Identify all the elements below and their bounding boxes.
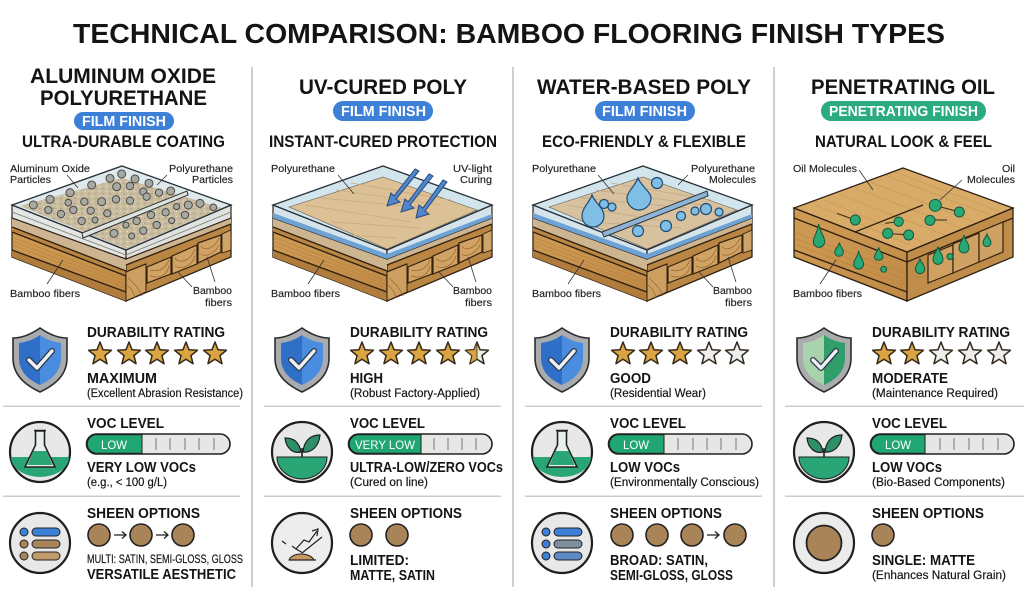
sheen options: SHEEN OPTIONS xyxy=(87,506,200,522)
sheen options: SINGLE: MATTE xyxy=(872,553,975,569)
voc level: VOC LEVEL xyxy=(87,416,164,432)
durability rating: MODERATE xyxy=(872,371,948,387)
sheen options: LIMITED: xyxy=(350,553,409,569)
label: polyurethane molecules: Molecules xyxy=(709,174,756,186)
heading: aluminum oxide polyurethane xyxy=(30,65,216,110)
diagram: penetrating oil floor cross-section xyxy=(794,168,1013,301)
durability rating xyxy=(87,325,243,400)
panel: uv-cured poly xyxy=(269,76,503,584)
durability rating: DURABILITY RATING xyxy=(872,325,1010,341)
sheen options: SEMI-GLOSS, GLOSS xyxy=(610,568,733,584)
icon: blue shield xyxy=(275,328,329,392)
voc level: LOW VOCs xyxy=(872,460,942,476)
label: bamboo fibers right: fibers xyxy=(465,297,492,309)
sheen options xyxy=(350,506,462,584)
label: polyurethane: Polyurethane xyxy=(532,163,596,175)
badge: penetrating finish: PENETRATING FINISH xyxy=(829,104,978,120)
heading: penetrating oil: PENETRATING OIL xyxy=(811,76,995,99)
voc level: VOC LEVEL xyxy=(350,416,425,432)
icon: sheen list xyxy=(10,513,70,573)
durability rating: DURABILITY RATING xyxy=(350,325,488,341)
icon: flask xyxy=(532,422,592,482)
label: bamboo fibers left: Bamboo fibers xyxy=(10,288,80,300)
badge: film finish xyxy=(595,101,695,121)
durability rating: HIGH xyxy=(350,371,383,387)
sheen options xyxy=(87,506,243,583)
label: aluminum oxide particles xyxy=(10,163,90,186)
voc level xyxy=(870,416,1014,489)
durability rating: MAXIMUM xyxy=(87,371,157,387)
sheen options: MATTE, SATIN xyxy=(350,568,435,584)
label: bamboo fibers: Bamboo fibers xyxy=(793,288,862,300)
durability rating: DURABILITY RATING xyxy=(87,325,225,341)
voc level: (e.g., < 100 g/L) xyxy=(87,477,167,489)
durability rating xyxy=(872,325,1010,400)
sheen options xyxy=(610,506,746,584)
label: bamboo fibers right: Bamboo xyxy=(713,285,752,297)
icon: blue shield xyxy=(535,328,589,392)
subheading: ECO-FRIENDLY & FLEXIBLE xyxy=(542,133,746,151)
voc level: LOW xyxy=(623,440,649,452)
heading: aluminum oxide polyurethane: POLYURETHANE xyxy=(40,87,207,110)
sheen options: VERSATILE AESTHETIC xyxy=(87,567,236,583)
label: bamboo fibers right: Bamboo xyxy=(193,285,232,297)
voc level: (Bio-Based Components) xyxy=(872,477,1005,489)
label: aluminum oxide particles: Aluminum Oxide xyxy=(10,163,90,175)
icon: application tool xyxy=(272,513,332,573)
sheen options: SHEEN OPTIONS xyxy=(610,506,722,522)
voc level xyxy=(86,416,230,489)
voc level: LOW xyxy=(101,440,127,452)
label: polyurethane molecules xyxy=(691,163,756,186)
subheading: ULTRA-DURABLE COATING xyxy=(22,133,225,151)
label: uv-light curing xyxy=(453,163,492,186)
label: bamboo fibers right: fibers xyxy=(725,297,752,309)
voc level xyxy=(608,416,759,489)
durability rating: GOOD xyxy=(610,371,651,387)
sheen options: SHEEN OPTIONS xyxy=(872,506,984,522)
title: TECHNICAL COMPARISON: BAMBOO FLOORING FINISH TYPES xyxy=(73,18,945,49)
label: bamboo fibers right xyxy=(713,285,752,309)
diagram: water-based floor cross-section xyxy=(533,166,752,301)
label: bamboo fibers right: Bamboo xyxy=(453,285,492,297)
panel: water-based poly xyxy=(532,76,759,584)
voc level: VOC LEVEL xyxy=(610,416,686,432)
voc level: VOC LEVEL xyxy=(872,416,947,432)
subheading: INSTANT-CURED PROTECTION xyxy=(269,133,497,151)
subheading: NATURAL LOOK & FEEL xyxy=(815,133,992,151)
label: polyurethane particles: Polyurethane xyxy=(169,163,233,175)
label: polyurethane: Polyurethane xyxy=(271,163,335,175)
sheen options: SHEEN OPTIONS xyxy=(350,506,462,522)
voc level: ULTRA-LOW/ZERO VOCs xyxy=(350,460,503,476)
label: polyurethane particles: Particles xyxy=(192,174,233,186)
badge: film finish: FILM FINISH xyxy=(602,104,687,120)
panel: penetrating oil xyxy=(793,76,1015,582)
heading: aluminum oxide polyurethane: ALUMINUM OXIDE xyxy=(30,65,216,88)
icon: flask xyxy=(10,422,70,482)
label: bamboo fibers left: Bamboo fibers xyxy=(271,288,340,300)
label: aluminum oxide particles: Particles xyxy=(10,174,51,186)
icon: single matte circle xyxy=(794,513,854,573)
diagram: uv-cured floor cross-section xyxy=(273,166,492,301)
label: oil molecules right: Molecules xyxy=(967,174,1015,186)
voc level: LOW xyxy=(885,440,911,452)
badge: film finish: FILM FINISH xyxy=(82,114,166,130)
label: oil molecules left: Oil Molecules xyxy=(793,163,857,175)
voc level: LOW VOCs xyxy=(610,460,680,476)
durability rating xyxy=(350,325,488,400)
label: oil molecules right: Oil xyxy=(1002,163,1015,175)
durability rating: (Maintenance Required) xyxy=(872,388,998,400)
label: bamboo fibers left: Bamboo fibers xyxy=(532,288,601,300)
sheen options: BROAD: SATIN, xyxy=(610,553,708,569)
sheen options: (Enhances Natural Grain) xyxy=(872,570,1006,582)
label: polyurethane particles xyxy=(169,163,233,186)
label: uv-light curing: Curing xyxy=(460,174,492,186)
voc level: (Environmentally Conscious) xyxy=(610,477,759,489)
icon: sheen list xyxy=(532,513,592,573)
label: polyurethane molecules: Polyurethane xyxy=(691,163,755,175)
durability rating: (Excellent Abrasion Resistance) xyxy=(87,388,243,400)
icon: plant xyxy=(794,422,854,482)
panel: aluminum oxide polyurethane xyxy=(10,65,243,583)
label: oil molecules right xyxy=(967,163,1015,186)
label: uv-light curing: UV-light xyxy=(453,163,492,175)
icon: green shield xyxy=(797,328,851,392)
sheen options xyxy=(872,506,1006,582)
voc level: (Cured on line) xyxy=(350,477,428,489)
label: bamboo fibers right xyxy=(193,285,232,309)
heading: water-based poly: WATER-BASED POLY xyxy=(537,76,751,99)
voc level: VERY LOW xyxy=(355,440,415,452)
badge: film finish xyxy=(333,101,433,121)
durability rating: (Residential Wear) xyxy=(610,388,706,400)
durability rating xyxy=(610,325,748,400)
durability rating: (Robust Factory-Applied) xyxy=(350,388,480,400)
badge: film finish: FILM FINISH xyxy=(341,104,426,120)
voc level xyxy=(348,416,503,489)
durability rating: DURABILITY RATING xyxy=(610,325,748,341)
label: bamboo fibers right xyxy=(453,285,492,309)
heading: uv-cured poly: UV-CURED POLY xyxy=(299,76,467,99)
diagram: aluminum oxide floor cross-section xyxy=(12,166,231,301)
icon: plant xyxy=(272,422,332,482)
sheen options: MULTI: SATIN, SEMI-GLOSS, GLOSS xyxy=(87,554,243,566)
label: bamboo fibers right: fibers xyxy=(205,297,232,309)
voc level: VERY LOW VOCs xyxy=(87,460,196,476)
icon: blue shield xyxy=(13,328,67,392)
